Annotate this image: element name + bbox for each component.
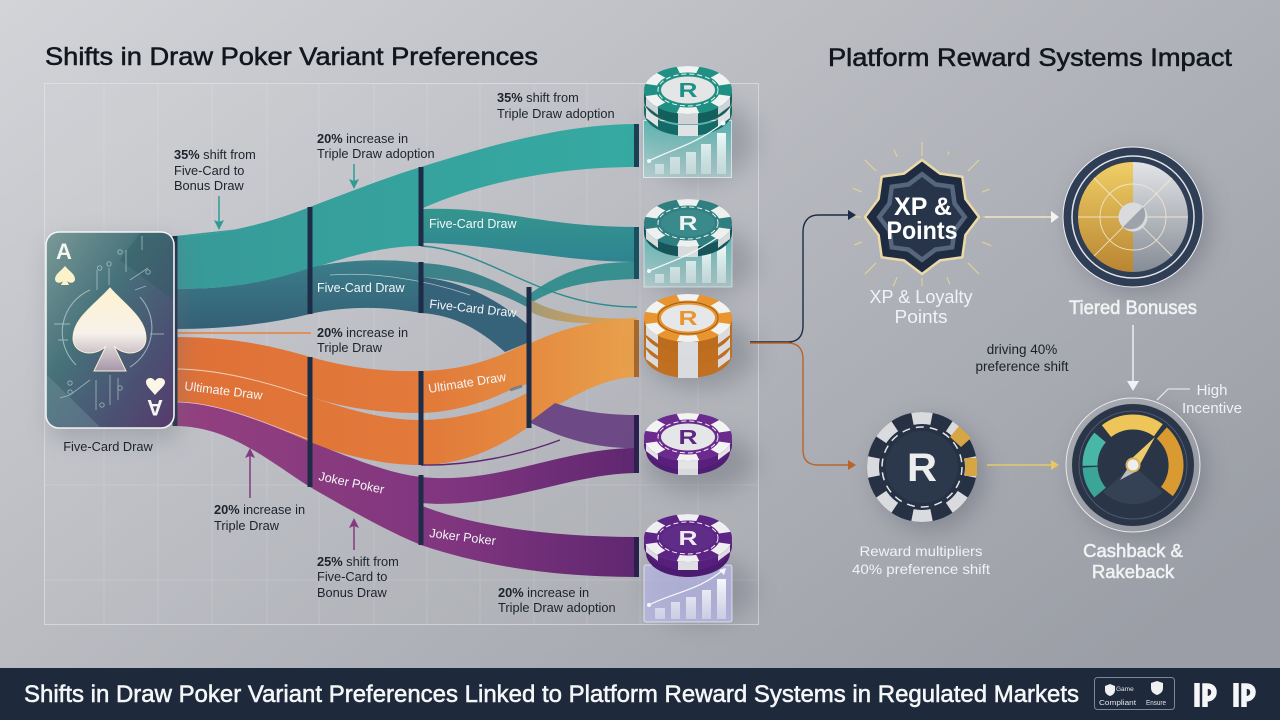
card: ace of spades xyxy=(46,232,180,440)
callout: bottom 20% increase xyxy=(498,585,616,615)
flow: teal return to second chip xyxy=(531,262,637,303)
chip stack: orange xyxy=(644,294,755,388)
callout: driving 40 percent: preference shift xyxy=(975,359,1069,374)
panel: sankey chart frame xyxy=(44,84,758,624)
callout: 25% shift: Five-Card to xyxy=(317,569,387,584)
title: left heading: Shifts in Draw Poker Variant Preferences xyxy=(45,43,538,71)
arrow: reward to cashback xyxy=(987,460,1059,470)
flow: tan blend xyxy=(531,300,637,323)
footer title: Shifts in Draw Poker Variant Preferences Linked to Platform Reward Systems in Regulated Markets xyxy=(24,681,1079,708)
callout: 20% increase triple draw xyxy=(317,325,408,355)
gauge: cashback and rakeback xyxy=(1066,398,1206,538)
label: reward multipliers: 40% preference shift xyxy=(852,561,990,577)
label: reward multipliers xyxy=(852,543,990,577)
chip: dark teal with chart xyxy=(644,199,755,298)
flow: dark teal band xyxy=(175,260,527,352)
card rank top: A xyxy=(56,239,72,264)
chip body: R xyxy=(678,213,698,235)
callout: 35% shift five-card: 35% shift from xyxy=(174,147,256,162)
callout: driving 40 percent xyxy=(975,342,1069,374)
chip: dark purple with chart xyxy=(644,514,755,624)
title: right heading: Platform Reward Systems Impact xyxy=(828,44,1232,72)
badge text: XP & xyxy=(894,193,952,221)
label: tiered bonuses: Tiered Bonuses xyxy=(1069,298,1197,319)
trend line xyxy=(647,120,726,163)
callout: high incentive: Incentive xyxy=(1182,400,1242,417)
lower chip xyxy=(644,102,732,136)
chip: reward multipliers: R xyxy=(907,446,937,490)
callout: lower 20% increase: 20% increase in xyxy=(214,502,305,517)
callout: 35% shift five-card: Bonus Draw xyxy=(174,178,244,193)
label: XP and loyalty points: Points xyxy=(894,307,948,327)
callout: lower 20% increase xyxy=(214,448,305,533)
flow labels: Five-Card Draw xyxy=(429,217,517,231)
growth chart panel xyxy=(644,565,732,622)
callout: bottom 20% increase: 20% increase in xyxy=(498,585,589,600)
arrow: XP to tiered bonuses xyxy=(985,211,1059,223)
compliance badge: Game xyxy=(1116,686,1134,693)
chip stack: purple xyxy=(644,413,755,492)
callout: 35% shift triple draw: 35% shift from xyxy=(497,90,579,105)
badge rays xyxy=(853,142,991,286)
card circuit traces xyxy=(54,236,164,410)
logo two xyxy=(1236,683,1253,707)
callout: driving 40 percent: driving 40% xyxy=(987,342,1057,357)
card large spade xyxy=(73,288,146,371)
callout: 20% increase triple draw: Triple Draw xyxy=(317,340,383,355)
card label: Five-Card Draw xyxy=(63,439,154,454)
flow: teal top band xyxy=(175,124,637,289)
label: cashback and rakeback xyxy=(1083,540,1184,582)
flow labels xyxy=(184,217,518,548)
flow labels: Joker Poker xyxy=(429,526,497,548)
callout: 25% shift: 25% shift from xyxy=(317,554,399,569)
footer bar xyxy=(0,668,1280,720)
callout: high incentive xyxy=(1157,382,1242,417)
compliance badge: Ensure xyxy=(1146,700,1166,707)
top chip: R xyxy=(678,80,698,102)
badge: XP and points: Points xyxy=(886,217,958,245)
callout: lower 20% increase: Triple Draw xyxy=(214,518,280,533)
compliance badge: Compliant xyxy=(1099,700,1136,707)
arrow: to XP and points xyxy=(750,210,856,343)
callout: 25% shift xyxy=(317,518,399,600)
card rank bottom: A xyxy=(147,395,163,420)
lower chips xyxy=(644,330,732,378)
flow: teal Five-Card branch xyxy=(421,209,637,262)
badge: XP and points xyxy=(853,142,991,286)
flow: thin purple line xyxy=(421,440,560,465)
callout: 35% shift five-card xyxy=(174,147,256,230)
card small heart xyxy=(146,378,165,395)
sankey flow chart xyxy=(175,124,637,577)
flow: muted purple band xyxy=(531,403,637,448)
callout: high incentive: High xyxy=(1197,382,1227,399)
callout: 20% increase adoption: 20% increase in xyxy=(317,131,408,146)
card small spade xyxy=(55,266,75,285)
label: cashback and rakeback: Rakeback xyxy=(1092,561,1175,582)
label: XP and loyalty points xyxy=(870,287,972,327)
flow: orange band xyxy=(175,320,637,465)
flow labels: Ultimate Draw xyxy=(184,379,264,403)
callout: 20% increase adoption xyxy=(317,131,435,189)
callout: 20% increase adoption: Triple Draw adoption xyxy=(317,146,435,161)
arrow: tiered to cashback xyxy=(1127,325,1139,391)
label: reward multipliers: Reward multipliers xyxy=(860,543,982,559)
trend line xyxy=(647,238,717,273)
flow labels: Joker Poker xyxy=(317,469,386,497)
growth chart panel xyxy=(644,120,732,178)
flow labels: Five-Card Draw xyxy=(429,297,518,320)
chip stack: teal with chart xyxy=(644,66,755,182)
dial: tiered bonuses xyxy=(1063,147,1210,294)
node bars xyxy=(175,124,636,577)
callout: 25% shift: Bonus Draw xyxy=(317,585,387,600)
label: XP and loyalty points: XP & Loyalty xyxy=(870,287,972,307)
callout: 35% shift triple draw: Triple Draw adoption xyxy=(497,106,615,121)
callout: 35% shift five-card: Five-Card to xyxy=(174,163,244,178)
growth chart panel xyxy=(644,232,732,287)
flow: purple band xyxy=(175,402,637,577)
trend line xyxy=(647,568,726,607)
top chip: R xyxy=(678,308,698,330)
chip stack: purple: R xyxy=(678,427,698,449)
callout: bottom 20% increase: Triple Draw adoption xyxy=(498,600,616,615)
chip body: R xyxy=(678,528,698,550)
logo one xyxy=(1197,683,1214,707)
compliance badge xyxy=(1094,678,1174,710)
arrow: to reward multipliers xyxy=(788,343,856,470)
flow: thin orange connector xyxy=(178,332,311,334)
flow: thin teal line xyxy=(421,246,637,307)
flow labels: Five-Card Draw xyxy=(317,281,405,295)
callout: 35% shift triple draw xyxy=(497,90,615,121)
label: cashback and rakeback: Cashback & xyxy=(1083,540,1184,561)
flow labels: Ultimate Draw xyxy=(427,370,508,396)
callout: 20% increase triple draw: 20% increase in xyxy=(317,325,408,340)
chip: reward multipliers xyxy=(867,412,985,530)
